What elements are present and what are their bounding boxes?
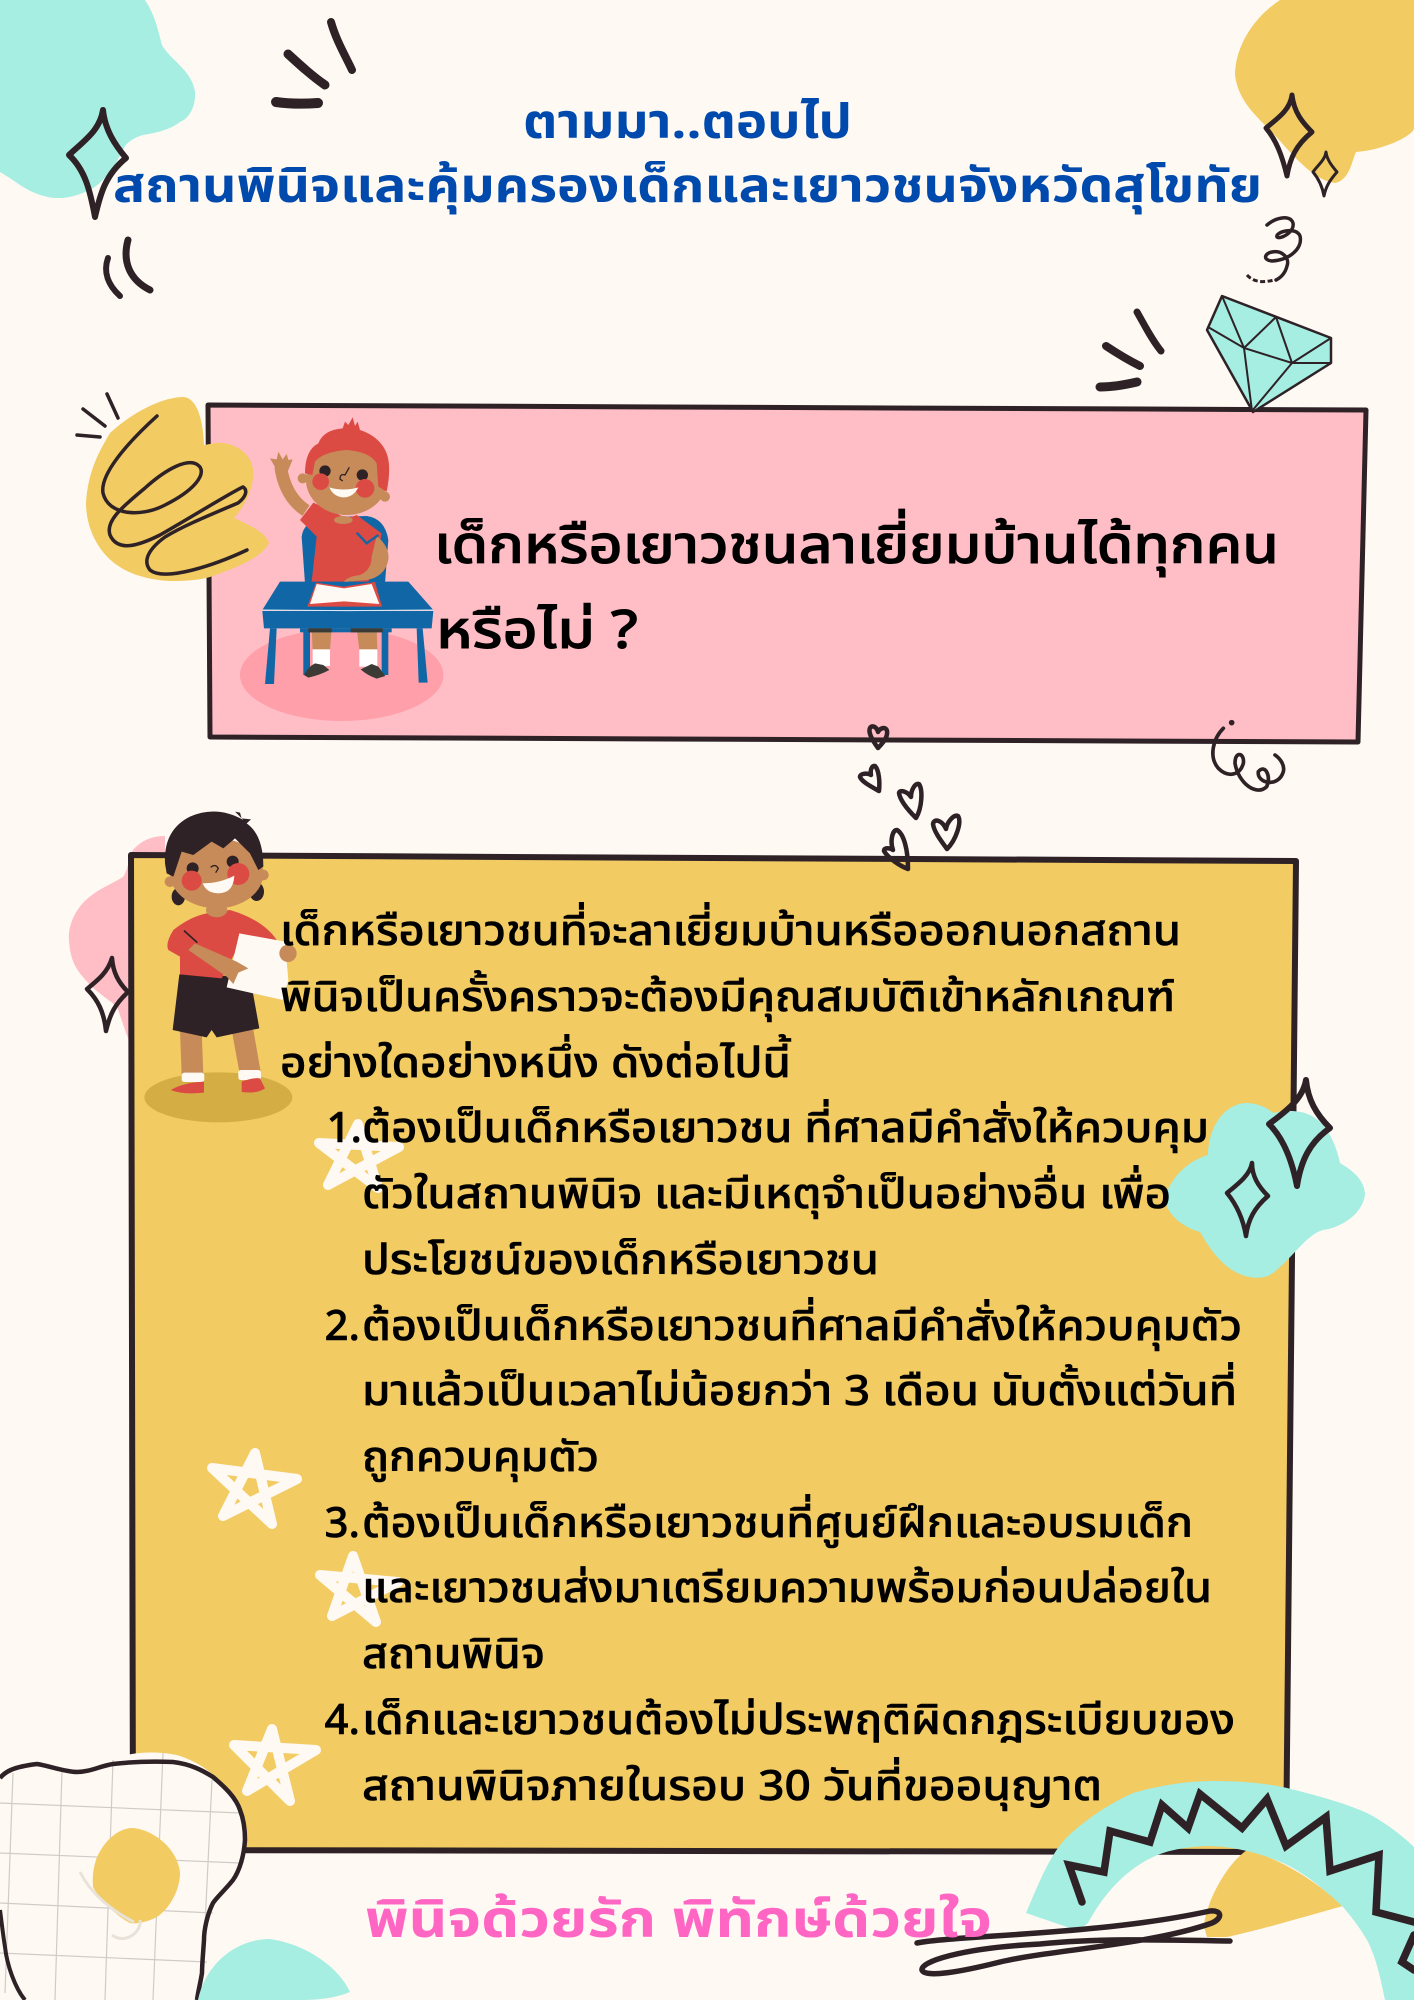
list item 3 — [324, 1492, 1212, 1687]
burst dashes top — [276, 22, 352, 104]
text block: criteria intro: พินิจเป็นครั้งคราวจะต้องมีคุณสมบัติเข้าหลักเกณฑ์ — [280, 966, 1175, 1030]
sparkles top right — [1266, 95, 1337, 196]
text block: criteria intro: เด็กหรือเยาวชนที่จะลาเยี่ยมบ้านหรือออกนอกสถาน — [280, 900, 1181, 964]
footer slogan: พินิจด้วยรัก พิทักษ์ด้วยใจ — [365, 1883, 992, 1961]
list item 1: ตัวในสถานพินิจ และมีเหตุจำเป็นอย่างอื่น เพื่อ — [362, 1163, 1171, 1227]
pink blob behind panel — [69, 836, 165, 1047]
icon: diamond — [1207, 296, 1331, 412]
heading: question text: เด็กหรือเยาวชนลาเยี่ยมบ้านได้ทุกคน — [434, 507, 1279, 587]
burst dashes near diamond — [1100, 312, 1161, 387]
illustration: boy at desk — [240, 417, 443, 721]
yellow blob top right — [1235, 0, 1414, 183]
panel: criteria — [131, 855, 1296, 1852]
white doodle stars — [212, 1124, 399, 1801]
list item 2: มาแล้วเป็นเวลาไม่น้อยกว่า 3 เดือน นับตั้งแต่วันที่ — [362, 1360, 1237, 1424]
list item 2: ถูกควบคุมตัว — [362, 1426, 599, 1490]
title: สถานพินิจและคุ้มครองเด็กและเยาวชนจังหวัดสุโขทัย — [113, 151, 1262, 224]
list item 2: 2. — [324, 1295, 360, 1359]
list item 4: เด็กและเยาวชนต้องไม่ประพฤติผิดกฎระเบียบของ — [362, 1689, 1235, 1753]
sparkle left of panel — [87, 958, 128, 1031]
teal arch bottom right — [1026, 1781, 1414, 2000]
list item 4: สถานพินิจภายในรอบ 30 วันที่ขออนุญาต — [362, 1755, 1102, 1819]
sparkle top left — [69, 110, 126, 217]
teal blob top left — [0, 0, 195, 198]
list item 2 — [324, 1295, 1242, 1490]
list item 1 — [326, 1097, 1209, 1293]
list item 3: และเยาวชนส่งมาเตรียมความพร้อมก่อนปล่อยใน — [362, 1557, 1212, 1621]
panel: question — [208, 405, 1366, 742]
list item 1: ต้องเป็นเด็กหรือเยาวชน ที่ศาลมีคำสั่งให้ควบคุม — [362, 1097, 1209, 1161]
list item 3: 3. — [324, 1492, 360, 1556]
title — [113, 87, 1262, 224]
teal blob bottom — [198, 1939, 350, 2000]
sparkles on teal blob — [1227, 1080, 1330, 1236]
curved marks left — [106, 240, 150, 296]
hearts — [860, 726, 959, 869]
zigzag on arch — [1069, 1794, 1414, 1970]
list item 4 — [324, 1689, 1235, 1819]
teal blob right — [1165, 1103, 1365, 1278]
text block: criteria intro — [280, 900, 1181, 1096]
list item 1: ประโยชน์ของเด็กหรือเยาวชน — [362, 1229, 879, 1293]
yellow scribble blob — [77, 394, 269, 581]
heading: question text: หรือไม่ ? — [436, 592, 638, 672]
title: ตามมา..ตอบไป — [523, 87, 852, 160]
heading: question text — [434, 507, 1279, 672]
illustration: boy with paper — [144, 812, 297, 1122]
pen scribble — [917, 1911, 1230, 1974]
grid paper tile bottom left — [0, 1753, 247, 2000]
swirl top right — [1247, 218, 1300, 282]
list item 3: ต้องเป็นเด็กหรือเยาวชนที่ศูนย์ฝึกและอบรมเด็ก — [362, 1492, 1193, 1556]
yellow shape inside arch — [1204, 1850, 1343, 1937]
list item 3: สถานพินิจ — [362, 1623, 545, 1687]
list item 2: ต้องเป็นเด็กหรือเยาวชนที่ศาลมีคำสั่งให้ควบคุมตัว — [362, 1295, 1242, 1359]
text block: criteria intro: อย่างใดอย่างหนึ่ง ดังต่อไปนี้ — [280, 1032, 791, 1096]
curly doodle — [1213, 722, 1284, 790]
list item 1: 1. — [326, 1097, 362, 1161]
list item 4: 4. — [324, 1689, 360, 1753]
